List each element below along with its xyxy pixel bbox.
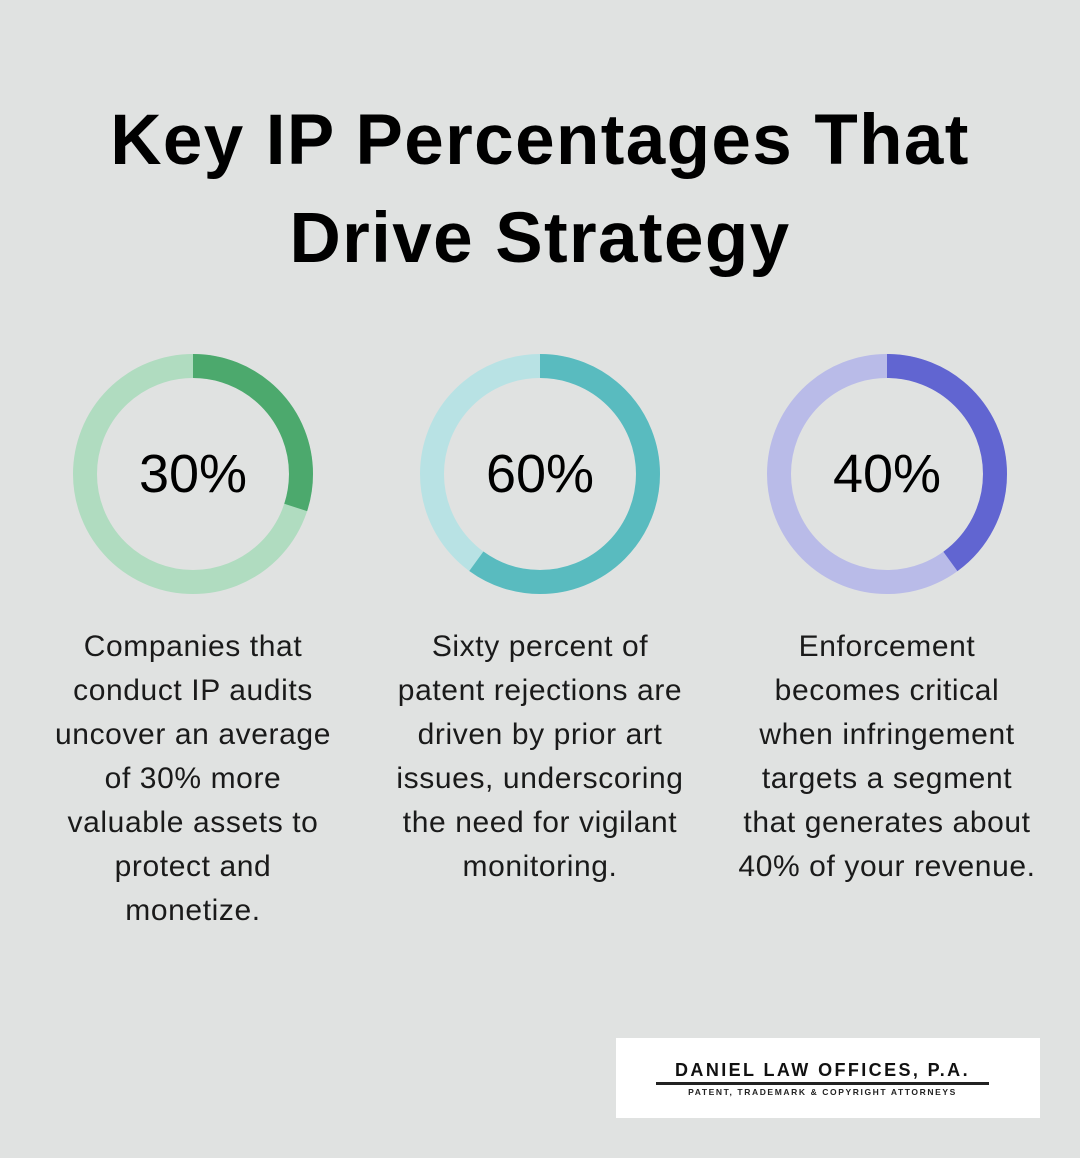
text: 60% description: monitoring. bbox=[462, 850, 618, 883]
text: 40% description: 40% of your revenue. bbox=[738, 850, 1036, 883]
text: 60% description: issues, underscoring bbox=[396, 762, 684, 795]
logo tagline: PATENT, TRADEMARK & COPYRIGHT ATTORNEYS bbox=[688, 1087, 957, 1097]
text: 30% description: Companies that bbox=[84, 630, 302, 663]
title bbox=[110, 101, 970, 278]
text: 40% description: Enforcement bbox=[799, 630, 975, 663]
text: 60% description: driven by prior art bbox=[418, 718, 662, 751]
logo name: DANIEL LAW OFFICES, P.A. bbox=[675, 1060, 970, 1080]
text: 30% description: protect and bbox=[115, 850, 271, 883]
text: 60% description bbox=[396, 630, 684, 883]
text: 30% description: uncover an average bbox=[55, 718, 331, 751]
donut: 40%: 40% bbox=[833, 444, 941, 504]
text: 60% description: the need for vigilant bbox=[403, 806, 677, 839]
text: 30% description: monetize. bbox=[125, 894, 261, 927]
text: 40% description: that generates about bbox=[743, 806, 1031, 839]
text: 30% description: valuable assets to bbox=[68, 806, 318, 839]
donut: 40% bbox=[779, 366, 995, 582]
text: 30% description bbox=[55, 630, 331, 927]
donut: 60% bbox=[432, 366, 648, 582]
text: 30% description: of 30% more bbox=[105, 762, 281, 795]
text: 40% description: targets a segment bbox=[762, 762, 1012, 795]
text: 60% description: Sixty percent of bbox=[432, 630, 648, 663]
text: 30% description: conduct IP audits bbox=[73, 674, 313, 707]
logo box bbox=[616, 1038, 1040, 1118]
donut: 60%: 60% bbox=[486, 444, 594, 504]
donut: 30% bbox=[85, 366, 301, 582]
title: Key IP Percentages That bbox=[110, 101, 970, 180]
text: 40% description: when infringement bbox=[759, 718, 1015, 751]
donut charts bbox=[73, 354, 1007, 594]
title: Drive Strategy bbox=[289, 199, 791, 278]
donut: 30%: 30% bbox=[139, 444, 247, 504]
text: 40% description: becomes critical bbox=[775, 674, 999, 707]
text: 60% description: patent rejections are bbox=[398, 674, 682, 707]
text: 40% description bbox=[738, 630, 1036, 883]
